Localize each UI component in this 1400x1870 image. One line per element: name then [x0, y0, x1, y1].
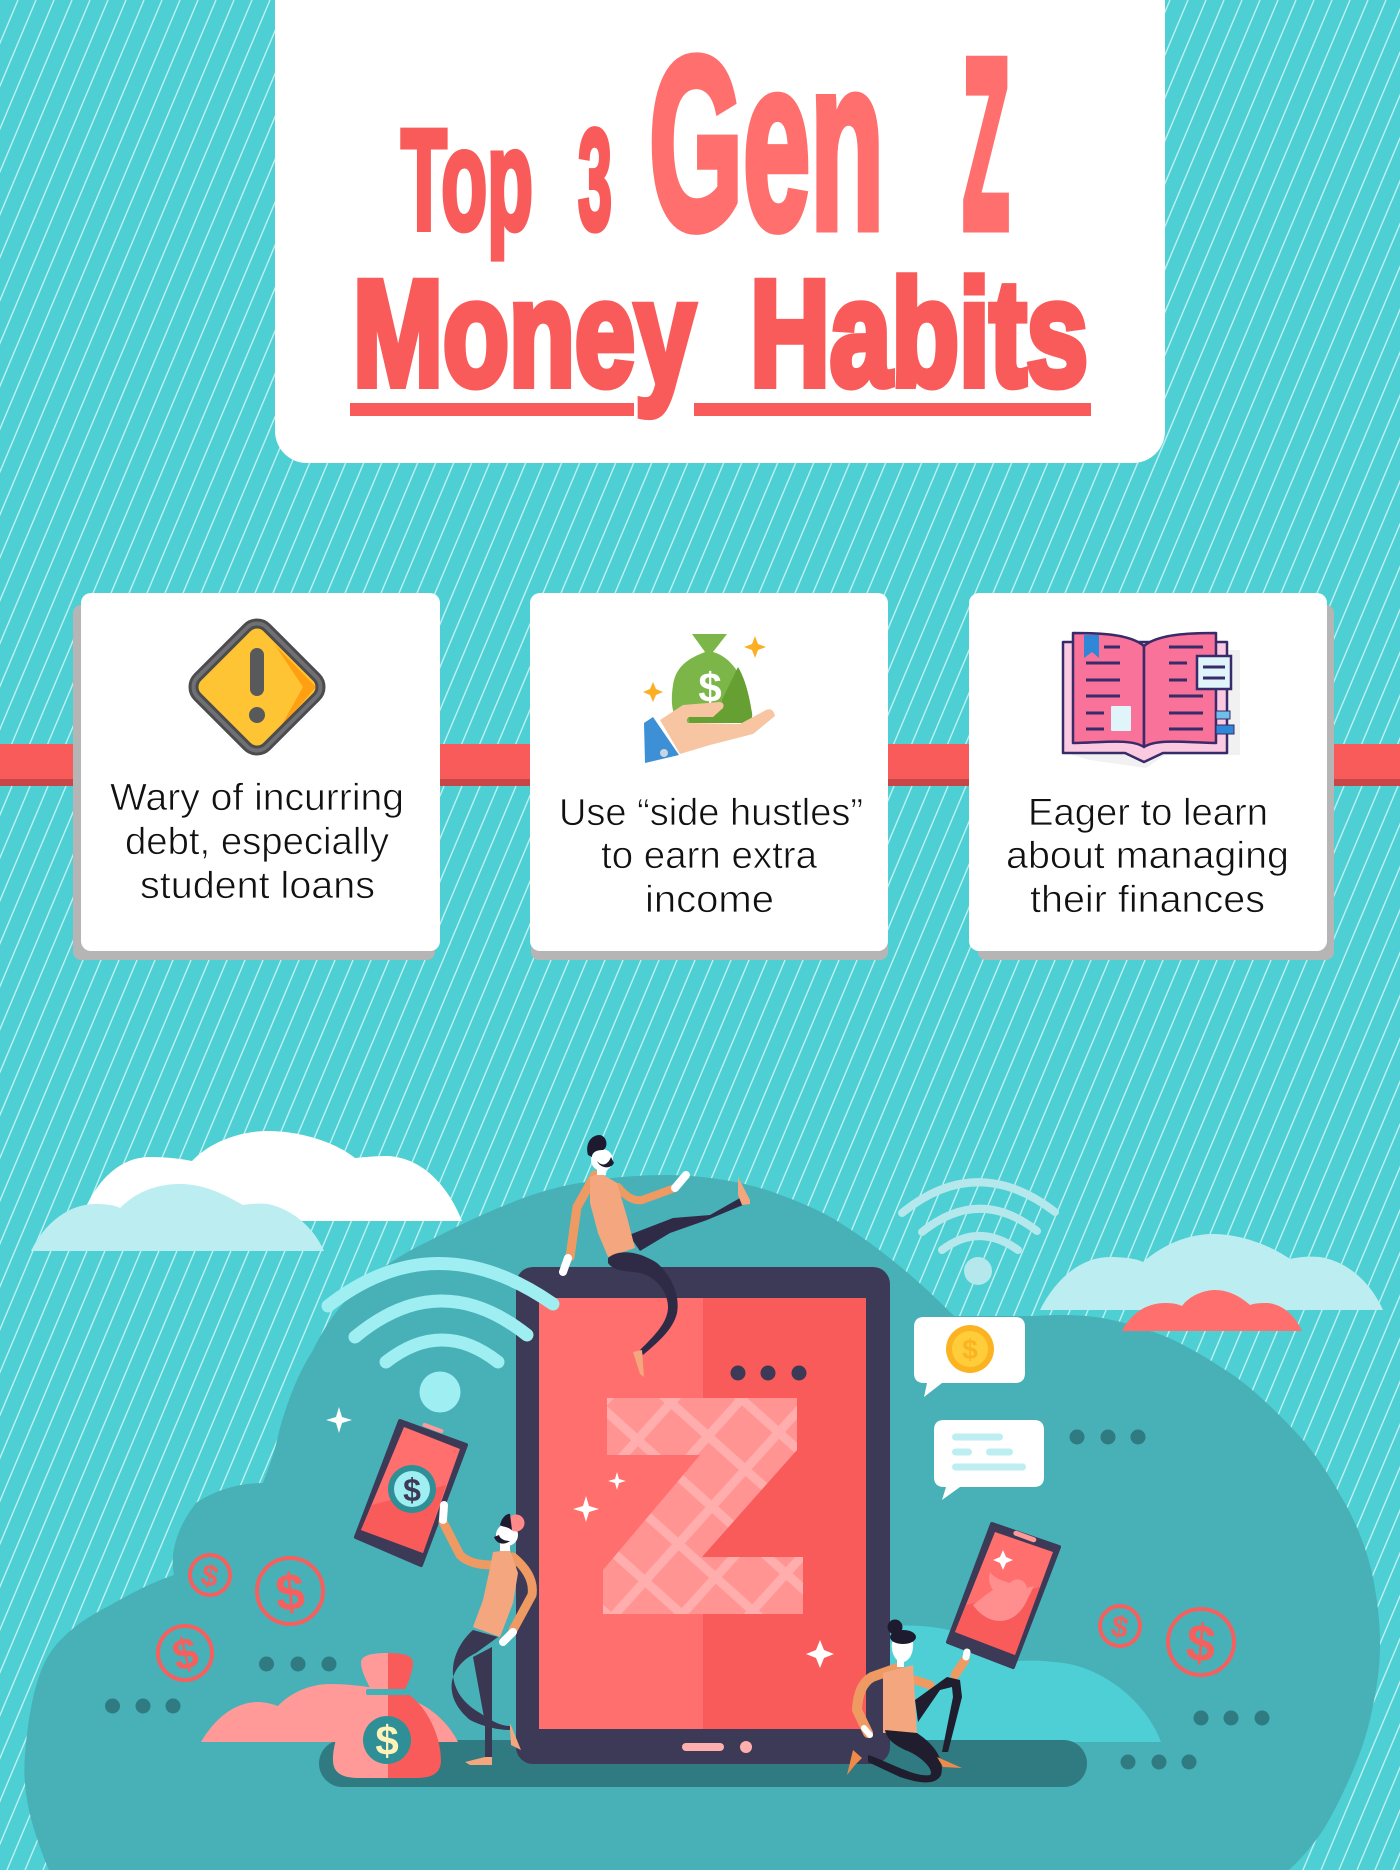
dollar coins right: $ [1184, 1614, 1218, 1674]
text: card 3 caption: Eager to learn [1028, 792, 1268, 834]
money bag: $ [375, 1717, 399, 1764]
dots row left upper [259, 1656, 336, 1672]
letter Z on tablet [603, 1398, 803, 1614]
cloud: pink bottom left [201, 1684, 458, 1742]
person kneeling with phone [847, 1620, 967, 1782]
panel: card 1 debt [73, 593, 440, 960]
dots row right middle [1194, 1710, 1270, 1726]
cloud: white top left [80, 1131, 462, 1221]
text: card 3 caption: about managing [1006, 835, 1289, 877]
dollar coins left: $ [273, 1563, 307, 1623]
dollar coins left [158, 1555, 323, 1681]
text: card 1 caption: Wary of incurring [110, 777, 404, 819]
sparkles [326, 1407, 1013, 1668]
icon: warning sign [188, 618, 326, 756]
title panel: 3 [578, 101, 612, 260]
text: card 3 caption: their finances [1030, 879, 1265, 921]
dots row left lower [105, 1698, 180, 1714]
title panel [275, 0, 1165, 463]
dollar coins right [1100, 1606, 1234, 1675]
chat bubble: coin: $ [962, 1334, 978, 1365]
title: Top 3: Top [401, 101, 533, 260]
text: card 2 caption: income [645, 879, 774, 921]
dots row right lower [1120, 1754, 1196, 1770]
phone left [356, 1421, 466, 1565]
text: card 2 caption: to earn extra [601, 835, 818, 877]
tablet [516, 1267, 890, 1764]
hill background [24, 1175, 1380, 1870]
title: Money Habits: Habits [750, 249, 1088, 417]
dots row right upper [1070, 1430, 1146, 1444]
icon: open book [1063, 633, 1240, 768]
title: Money Habits [350, 249, 1091, 417]
icon: money bag in hand [643, 634, 775, 763]
cloud: red top right [1122, 1290, 1302, 1331]
chat bubble: message [934, 1420, 1044, 1500]
dollar coins right: $ [1108, 1610, 1132, 1645]
icon: money bag in hand: $ [698, 664, 722, 711]
text: card 1 caption [110, 777, 404, 907]
dollar coins left: $ [168, 1628, 203, 1681]
person leaning on tablet [443, 1505, 532, 1765]
panel: card 2 side hustles [530, 593, 888, 960]
wifi signal large [328, 1263, 553, 1412]
phone left: $ [403, 1472, 421, 1508]
person sitting on tablet [563, 1135, 750, 1377]
title: Gen Z: Gen [649, 6, 884, 280]
cloud: pale blue top left [31, 1184, 324, 1251]
text: card 1 caption: student loans [140, 865, 375, 907]
cloud: pale blue top right [1040, 1234, 1383, 1310]
phone right with bird [948, 1524, 1059, 1667]
dollar coins left: $ [198, 1559, 222, 1594]
illustration: Gen Z tech scene [24, 1131, 1383, 1870]
chat bubble: coin [914, 1317, 1025, 1397]
icon: bird [973, 1572, 1034, 1621]
title panel: Z [963, 12, 1009, 277]
text: card 2 caption: Use “side hustles” [559, 792, 863, 834]
text: card 3 caption [1006, 792, 1289, 921]
panel: card 3 learning [969, 593, 1334, 960]
mound: light teal [890, 1625, 1161, 1742]
text: card 1 caption: debt, especially [125, 821, 389, 863]
ground shadow [319, 1740, 1087, 1787]
red connector band [0, 744, 1400, 786]
title: Money Habits: Money [353, 249, 695, 417]
wifi signal small [902, 1182, 1055, 1285]
text: card 2 caption [559, 792, 863, 921]
money bag [333, 1653, 441, 1778]
